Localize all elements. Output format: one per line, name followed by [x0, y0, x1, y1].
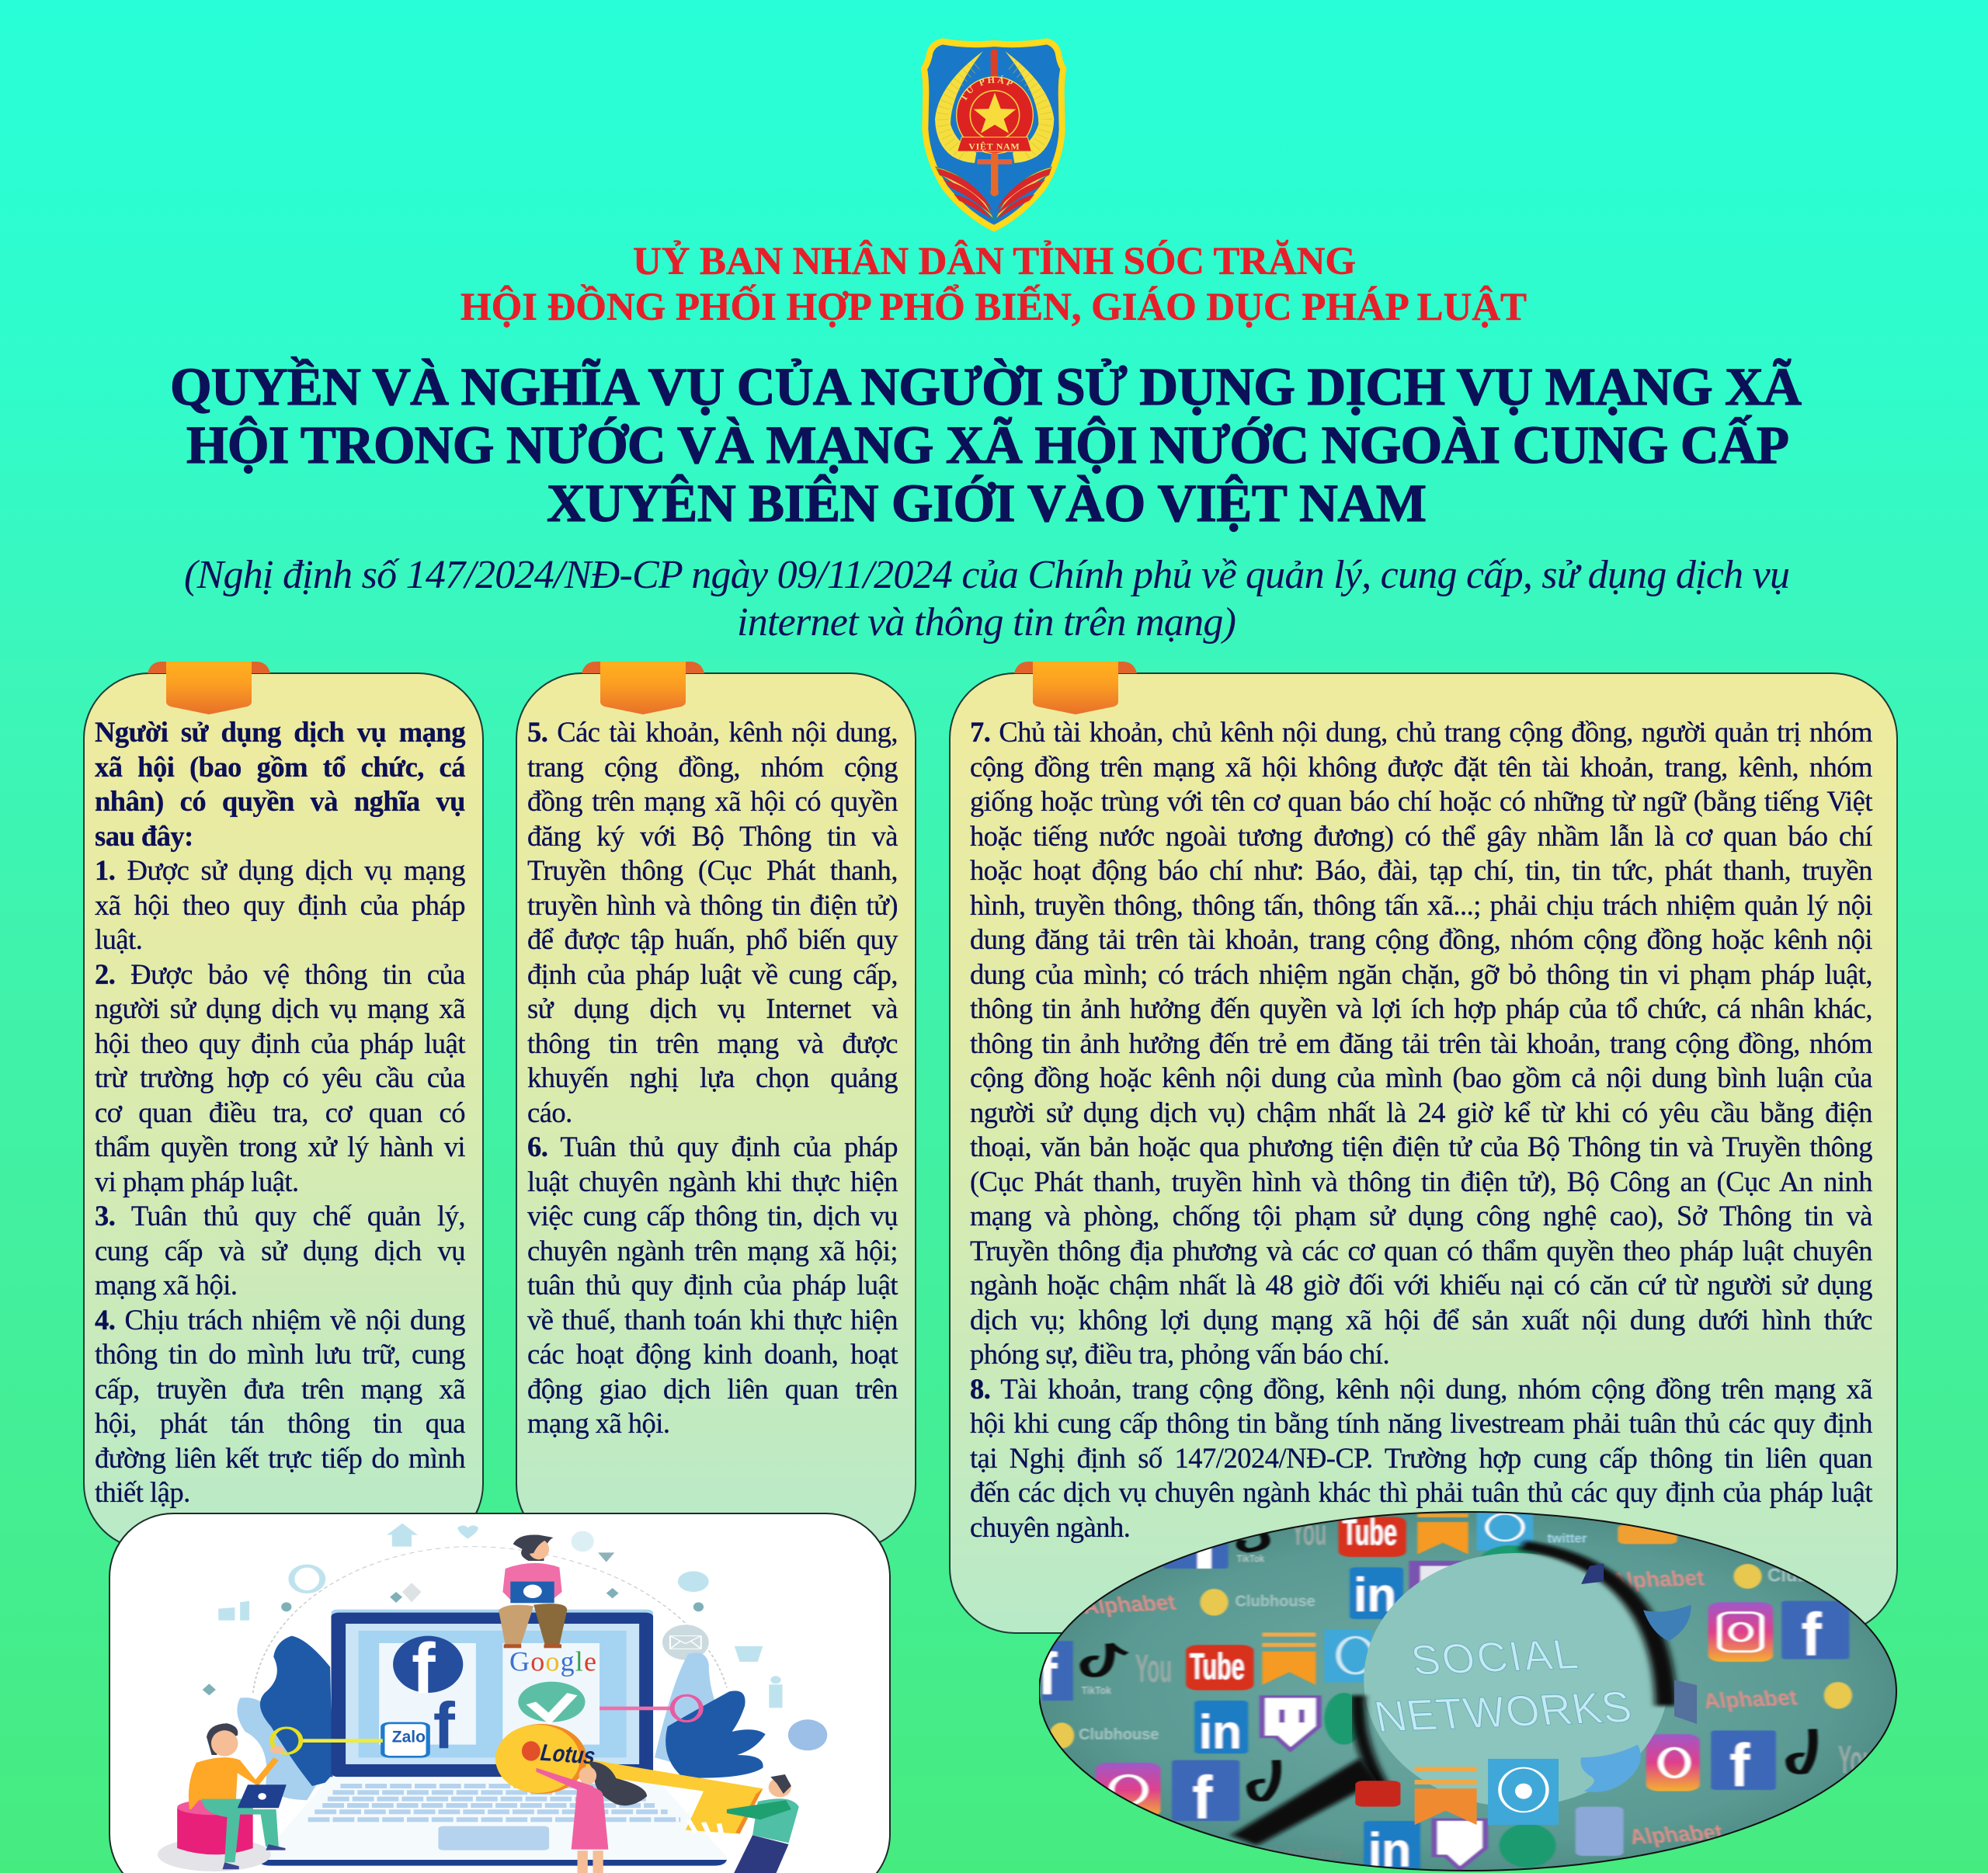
text block: rights 5 and 6: Truyền thông (Cục Phát thanh, — [527, 854, 898, 886]
text block: rights 5 and 6: 5. Các tài khoản, kênh nội dung, — [527, 716, 898, 748]
text block: rights 1 to 4: trừ trường hợp có yêu cầu của — [95, 1062, 465, 1093]
organisation heading — [461, 239, 1527, 329]
photo: social networks under a magnifying glass: f — [1192, 1764, 1213, 1832]
text block: rights 7 and 8: ngành hoặc chậm nhất là 48 giờ đối với khiếu nại có căn cứ từ người sử dụng — [970, 1269, 1872, 1301]
photo: social networks under a magnifying glass: You — [1135, 1645, 1172, 1691]
subtitle: legal reference — [184, 553, 1790, 645]
text block: rights 7 and 8: thoại, văn bản hoặc qua phương tiện điện tử của Bộ Thông tin và Truyền thông — [970, 1131, 1872, 1162]
text block: rights 1 to 4: thiết lập. — [95, 1476, 190, 1508]
text block: rights 7 and 8: giống hoặc trùng với tên cơ quan báo chí hoặc có những từ ngữ (bằng tiếng Việt — [970, 785, 1872, 817]
photo: social networks under a magnifying glass: in — [1354, 1569, 1396, 1622]
photo: social networks under a magnifying glass: NETWORKS — [1371, 1682, 1636, 1741]
photo: social networks under a magnifying glass: You — [1838, 1737, 1875, 1782]
emblem: Tư pháp Việt Nam shield: VIỆT NAM — [968, 141, 1020, 152]
text block: rights 7 and 8: chuyên ngành. — [970, 1511, 1130, 1542]
text block: rights 7 and 8: phóng sự, điều tra, phỏng vấn báo chí. — [970, 1338, 1389, 1370]
text block: rights 1 to 4: hội, phát tán thông tin qua — [95, 1407, 465, 1439]
text block: rights 7 and 8 — [970, 716, 1873, 1544]
text block: rights 5 and 6: mạng xã hội. — [527, 1407, 670, 1439]
text block: rights 5 and 6: thông tin trên mạng và được — [527, 1027, 898, 1059]
text block: rights 1 to 4: đường liên kết trực tiếp do mình — [95, 1441, 465, 1474]
text block: rights 1 to 4: người sử dụng dịch vụ mạng xã — [95, 992, 465, 1024]
illustration: people with laptop, key and platform logos: Zalo — [392, 1728, 426, 1746]
text block: rights 7 and 8: dung đăng tải trên tài khoản, trang cộng đồng, nhóm cộng đồng hoặc kênh nội — [970, 923, 1872, 955]
text block: rights 1 to 4: thông tin do mình lưu trữ, cung — [95, 1338, 465, 1370]
text block: rights 7 and 8: cộng đồng hoặc kênh nội dung của mình (bao gồm cả nội dung bình luận của — [970, 1062, 1872, 1093]
photo: social networks under a magnifying glass: in — [1199, 1706, 1242, 1760]
magnifying lens — [1364, 1553, 1669, 1807]
text block: rights 5 and 6: truyền hình và thông tin điện tử) — [527, 888, 898, 921]
text block: rights 5 and 6: sử dụng dịch vụ Internet và — [527, 992, 898, 1024]
text block: rights 1 to 4: luật. — [95, 923, 142, 955]
photo: social networks under a magnifying glass: Alphabet — [1609, 1565, 1706, 1593]
text block: rights 5 and 6 — [527, 716, 898, 1440]
row 2 — [1350, 1567, 1403, 1619]
text block: rights 1 to 4: cấp, truyền đưa trên mạng xã — [95, 1373, 465, 1404]
text block: rights 1 to 4: Người sử dụng dịch vụ mạng — [95, 716, 465, 748]
organisation heading: HỘI ĐỒNG PHỐI HỢP PHỔ BIẾN, GIÁO DỤC PHÁP LUẬT — [461, 284, 1527, 329]
text block: rights 1 to 4: 1. Được sử dụng dịch vụ mạng — [95, 854, 465, 886]
text block: rights 5 and 6: động giao dịch liên quan trên — [527, 1373, 898, 1404]
text block: rights 5 and 6: về thuế, thanh toán khi thực hiện — [527, 1303, 898, 1336]
text block: rights 7 and 8: đến các dịch vụ chuyên ngành khác thì phải tuân thủ các quy định của pháp luật — [970, 1476, 1872, 1508]
photo: social networks under a magnifying glass: f — [1729, 1731, 1750, 1799]
photo: social networks under a magnifying glass: Clubhouse — [1767, 1565, 1864, 1586]
text block: rights 7 and 8: Truyền thông địa phương và các cơ quan có thẩm quyền theo pháp luật chuyên — [970, 1235, 1872, 1266]
text block: rights 1 to 4: xã hội theo quy định của pháp — [95, 888, 465, 921]
illustration: people with laptop, key and platform logos: Google — [509, 1646, 596, 1677]
ribbon: panel 2 — [582, 662, 704, 714]
text block: rights 7 and 8: cộng đồng trên mạng xã hội không được đặt tên tài khoản, trang, kênh, nhóm — [970, 750, 1872, 783]
text block: rights 5 and 6: việc cung cấp thông tin, dịch vụ — [527, 1200, 898, 1232]
text block: rights 1 to 4: mạng xã hội. — [95, 1269, 238, 1301]
text block: rights 7 and 8: hình, truyền thông, thông tấn, thông tấn xã...; phải chịu trách nhiệm quản lý nội — [970, 888, 1872, 921]
text block: rights 5 and 6: trang cộng đồng, nhóm cộng — [527, 750, 898, 783]
photo: social networks under a magnifying glass: Alphabet — [1079, 1590, 1178, 1618]
photo: social networks under a magnifying glass: TikTok — [1082, 1684, 1112, 1697]
main title: QUYỀN VÀ NGHĨA VỤ CỦA NGƯỜI SỬ DỤNG DỊCH VỤ MẠNG XÃ — [170, 356, 1802, 416]
text block: rights 1 to 4: thẩm quyền trong xử lý hành vi — [95, 1131, 465, 1162]
text block: rights 5 and 6: đăng ký với Bộ Thông tin và — [527, 820, 898, 851]
text block: rights 7 and 8: tại Nghị định số 147/2024/NĐ-CP. Trường hợp cung cấp thông tin liên quan — [970, 1441, 1872, 1474]
text block: rights 1 to 4: sau đây: — [95, 820, 193, 851]
text block: rights 5 and 6: 6. Tuân thủ quy định của pháp — [527, 1131, 898, 1162]
subtitle: legal reference: (Nghị định số 147/2024/NĐ-CP ngày 09/11/2024 của Chính phủ về quản lý, cung cấp, sử dụng dịch vụ — [184, 553, 1790, 597]
text block: rights 5 and 6: các hoạt động kinh doanh, hoạt — [527, 1338, 898, 1370]
text block: rights 7 and 8: (Cục Phát thanh, truyền hình và thông tin điện tử), Bộ Công an (Cục An ninh — [970, 1165, 1872, 1197]
photo: social networks under a magnifying glass: TikTok — [1237, 1553, 1264, 1565]
text block: rights 5 and 6: luật chuyên ngành khi thực hiện — [527, 1165, 898, 1197]
panel: rights 5 and 6 — [516, 672, 916, 1550]
text block: rights 5 and 6: cáo. — [527, 1096, 572, 1128]
text block: rights 7 and 8: thông tin ảnh hưởng đến trẻ em đăng tải trên tài khoản, trang cộng đồng, nhóm — [970, 1027, 1872, 1059]
text block: rights 7 and 8: mạng và phòng, chống tội phạm sử dụng công nghệ cao), Sở Thông tin và — [970, 1200, 1872, 1232]
photo: social networks under a magnifying glass: f — [1802, 1600, 1823, 1669]
text block: rights 1 to 4: vi phạm pháp luật. — [95, 1165, 299, 1197]
photo: social networks under a magnifying glass: Tube — [1343, 1511, 1397, 1553]
text block: rights 7 and 8: 7. Chủ tài khoản, chủ kênh nội dung, chủ trang cộng đồng, người quản trị nhóm — [970, 716, 1872, 748]
key — [578, 1757, 763, 1834]
right man — [769, 1777, 791, 1797]
text block: rights 5 and 6: tuân thủ quy định của pháp luật — [527, 1269, 898, 1301]
ribbon: panel 1 — [148, 662, 270, 714]
ribbon: panel 3 — [1014, 662, 1137, 714]
text block: rights 1 to 4: cung cấp và sử dụng dịch vụ — [95, 1235, 465, 1266]
illustration: people with laptop, key and platform logos — [109, 1513, 891, 1873]
text block: rights 1 to 4: xã hội (bao gồm tổ chức, cá — [95, 750, 465, 783]
emblem: Tư pháp Việt Nam shield: TƯ PHÁP — [960, 75, 1013, 101]
text block: rights 5 and 6: để được tập huấn, phổ biến quy — [527, 923, 898, 955]
text block: rights 7 and 8: người sử dụng dịch vụ) chậm nhất là 24 giờ kể từ khi có yêu cầu bằng điện — [970, 1096, 1872, 1128]
row 3 — [1708, 1602, 1773, 1662]
text block: rights 1 to 4: nhân) có quyền và nghĩa vụ — [95, 785, 465, 817]
text block: rights 5 and 6: định của pháp luật về cung cấp, — [527, 958, 898, 989]
main title: XUYÊN BIÊN GIỚI VÀO VIỆT NAM — [547, 474, 1427, 533]
left man — [158, 1838, 271, 1871]
text block: rights 7 and 8: dịch vụ; không lợi dụng mạng xã hội để sản xuất nội dung dưới hình thức — [970, 1303, 1872, 1336]
illustration: people with laptop, key and platform logos: f — [412, 1629, 436, 1708]
panel: rights 7 and 8 — [949, 672, 1898, 1634]
text block: rights 7 and 8: hoặc hoạt động báo chí như: Báo, đài, tạp chí, tin, tin tức, phát thanh, truyền — [970, 854, 1872, 886]
text block: rights 1 to 4: cơ quan điều tra, cơ quan có — [95, 1096, 465, 1128]
photo: social networks under a magnifying glass: Tube — [1190, 1646, 1245, 1687]
photo: social networks under a magnifying glass: twitter — [1547, 1531, 1587, 1546]
text block: rights 7 and 8: hội khi cung cấp thông tin bằng tính năng livestream phải tuân thủ các quy định — [970, 1407, 1872, 1439]
text block: rights 1 to 4: hội theo quy định của pháp luật — [95, 1027, 465, 1059]
photo: social networks under a magnifying glass: Clubhouse — [1262, 1845, 1343, 1862]
panel: rights 1 to 4 — [83, 672, 484, 1550]
photo: social networks under a magnifying glass: Clubhouse — [1235, 1593, 1315, 1610]
text block: rights 5 and 6: đồng trên mạng xã hội có quyền — [527, 785, 898, 817]
text block: rights 5 and 6: chuyên ngành trên mạng xã hội; — [527, 1235, 898, 1266]
in-focus icons — [1415, 1788, 1477, 1825]
emblem: Tư pháp Việt Nam shield — [921, 38, 1067, 231]
brand tiles, row 1 — [1163, 1543, 1229, 1569]
text block: rights 7 and 8: dung của mình; có trách nhiệm ngăn chặn, gỡ bỏ thông tin vi phạm pháp luật, — [970, 958, 1872, 989]
top man — [513, 1534, 553, 1561]
row 4: Alphabet — [1701, 1685, 1799, 1713]
photo: social networks under a magnifying glass: You — [1291, 1512, 1326, 1554]
row 5 — [1096, 1763, 1160, 1817]
text block: rights 7 and 8: 8. Tài khoản, trang cộng đồng, kênh nội dung, nhóm cộng đồng trên mạng xã — [970, 1373, 1872, 1404]
organisation heading: UỶ BAN NHÂN DÂN TỈNH SÓC TRĂNG — [633, 240, 1356, 283]
photo: social networks under a magnifying glass: Clubhouse — [1079, 1726, 1159, 1743]
illustration: people with laptop, key and platform logos: Lotus — [537, 1739, 599, 1770]
main title: HỘI TRONG NƯỚC VÀ MẠNG XÃ HỘI NƯỚC NGOÀI CUNG CẤP — [186, 414, 1789, 474]
main title — [170, 356, 1802, 533]
photo: social networks under a magnifying glass: Alphabet — [1627, 1819, 1726, 1849]
photo: social networks under a magnifying glass — [1039, 1511, 1897, 1871]
text block: rights 7 and 8: hoặc tiếng nước ngoài tương đương) có thể gây nhầm lẫn là cơ quan báo chí — [970, 820, 1872, 851]
subtitle: legal reference: internet và thông tin trên mạng) — [737, 600, 1236, 645]
text block: rights 7 and 8: thông tin ảnh hưởng đến quyền và lợi ích hợp pháp của tổ chức, cá nhân khác, — [970, 992, 1872, 1024]
text block: rights 1 to 4: 2. Được bảo vệ thông tin của — [95, 958, 465, 989]
text block: rights 5 and 6: khuyến nghị lựa chọn quảng — [527, 1062, 898, 1093]
text block: rights 1 to 4: 3. Tuân thủ quy chế quản lý, — [95, 1200, 465, 1232]
photo: social networks under a magnifying glass: SOCIAL — [1407, 1630, 1583, 1684]
woman — [588, 1761, 647, 1805]
text block: rights 1 to 4 — [95, 716, 466, 1508]
illustration: people with laptop, key and platform logos: f — [433, 1690, 456, 1763]
text block: rights 1 to 4: 4. Chịu trách nhiệm về nội dung — [95, 1303, 465, 1336]
